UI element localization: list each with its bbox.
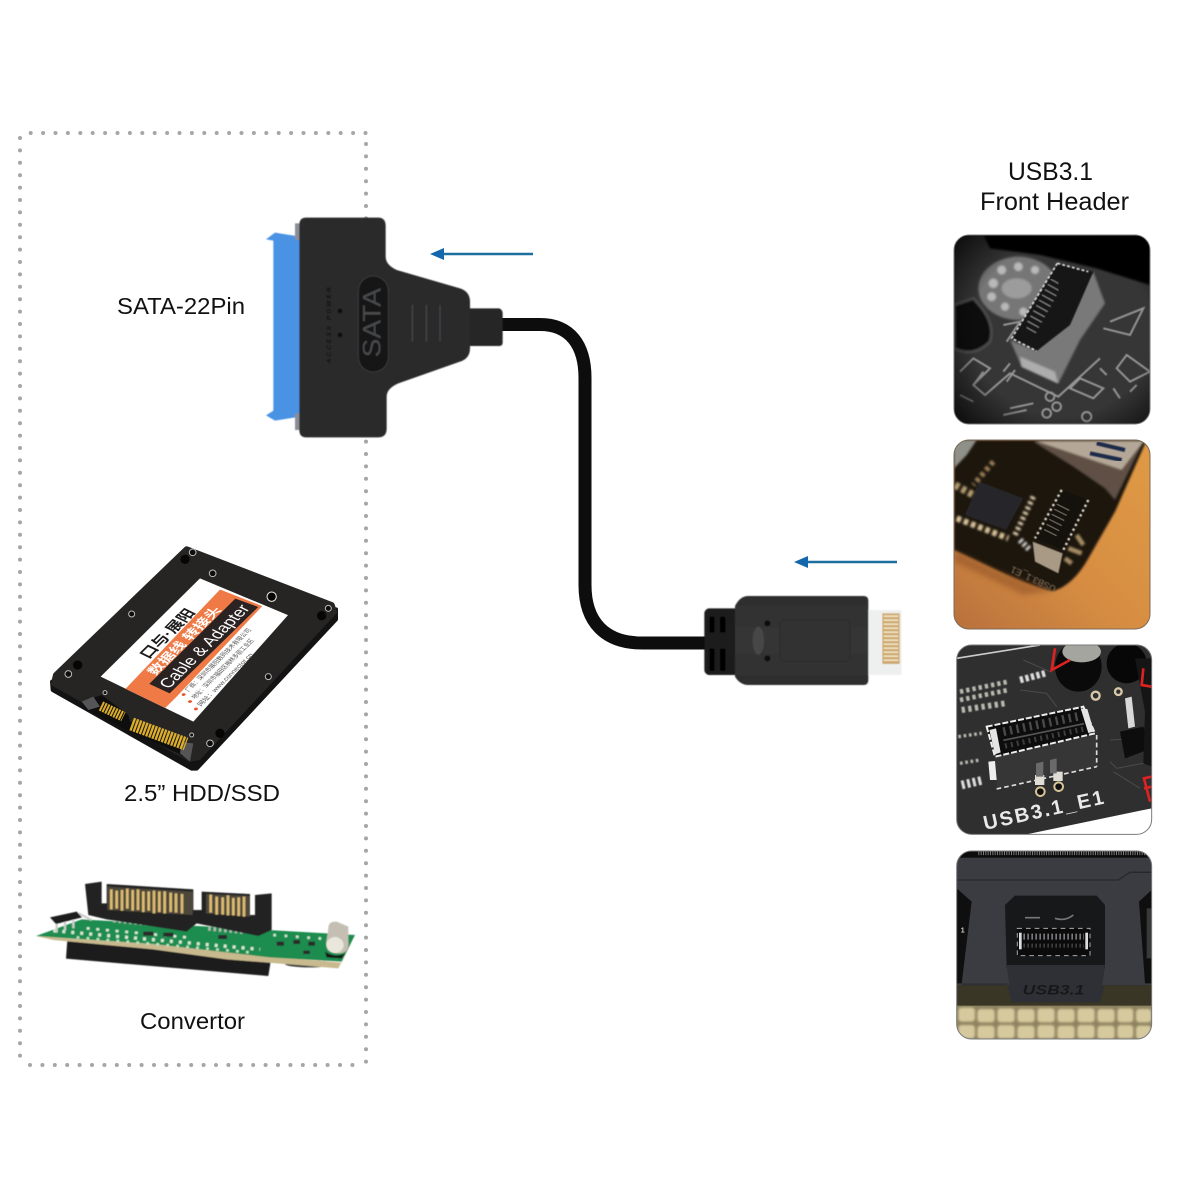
PCB edge xyxy=(36,936,354,968)
voltage regulator legs xyxy=(57,913,92,933)
voltage regulator xyxy=(50,912,82,924)
mounting recesses xyxy=(73,555,326,738)
address lines: 厂商：深圳市展阳数码技术有限公司 xyxy=(182,627,253,693)
crystal base xyxy=(325,952,345,958)
card outline xyxy=(954,440,1150,629)
bottom board band xyxy=(957,985,1152,1007)
data contact cavity xyxy=(107,887,193,915)
data contacts xyxy=(110,889,245,917)
panel: dotted SATA device frame xyxy=(20,133,366,1065)
white corner xyxy=(1023,808,1152,835)
address lines: 网址：www.connector.cn xyxy=(195,651,255,707)
silk text: USB3.1_E1 xyxy=(1009,564,1058,594)
white latch part xyxy=(988,761,997,780)
ribbed strain relief xyxy=(704,608,735,675)
wooden background xyxy=(954,440,1150,629)
SATA badge: SATA xyxy=(360,287,387,357)
port top face xyxy=(1035,441,1144,470)
white plug tongue xyxy=(868,610,902,675)
top vent strip xyxy=(957,851,1152,858)
keyhole xyxy=(267,592,276,601)
Chinese product line: 数据线 转接头 xyxy=(143,604,225,677)
header body xyxy=(1017,928,1090,956)
shroud highlight line xyxy=(957,872,1152,880)
label: 2.5 inch HDD/SSD: 2.5” HDD/SSD xyxy=(124,780,280,806)
right pin header xyxy=(1125,697,1135,728)
header lower pins xyxy=(1023,940,1084,952)
blurred left components xyxy=(954,440,977,468)
translucent connector shroud xyxy=(1010,272,1105,383)
pads group left xyxy=(958,673,1045,785)
heading: USB3.1 Front Header xyxy=(980,158,1129,216)
red annotation marks xyxy=(1052,648,1152,802)
socket side latches xyxy=(989,708,1094,754)
metal IO port xyxy=(1033,442,1143,500)
SATA badge xyxy=(358,276,388,372)
screw holes xyxy=(65,549,331,747)
crystal oscillator xyxy=(326,922,349,953)
side number: 1 xyxy=(961,925,965,934)
solder dots xyxy=(955,462,1083,563)
icon: 2.5 inch SSD enclosure xyxy=(52,549,336,769)
blurred power socket xyxy=(978,257,1058,320)
heading: USB3.1 Front Header: USB3.1 xyxy=(1008,158,1093,186)
orange band xyxy=(122,587,266,708)
right slot detail xyxy=(1147,908,1152,958)
socket pins xyxy=(1048,507,1063,537)
card outline xyxy=(957,645,1152,834)
socket pins xyxy=(1028,282,1057,333)
SATA connector recess xyxy=(82,695,193,762)
moulded plug body xyxy=(735,596,868,685)
arrow: into USB header xyxy=(794,556,897,568)
board background xyxy=(954,235,1150,424)
solder pads xyxy=(53,920,340,953)
header white sides xyxy=(1019,933,1088,949)
silk label USB3.1_E1: USB3.1_E1 xyxy=(981,787,1106,835)
label: Convertor: Convertor xyxy=(140,1008,245,1034)
shroud lower arm xyxy=(962,983,1145,1002)
socket dotted edges xyxy=(1035,490,1088,550)
photo: header in motherboard shroud xyxy=(957,851,1152,1039)
top pins xyxy=(957,645,1040,658)
Cable &amp; Adapter: Cable & Adapter xyxy=(154,601,254,691)
power contact cavity xyxy=(206,894,250,917)
socket edge highlights xyxy=(1012,263,1088,351)
strain relief neck xyxy=(470,308,503,346)
photo: header on board with wood background xyxy=(954,440,1150,629)
capacitors xyxy=(1055,641,1147,692)
white connector frame xyxy=(987,707,1095,757)
black socket below board xyxy=(66,940,272,976)
SATA plug housing xyxy=(85,882,272,936)
vignette xyxy=(954,235,1150,424)
header socket xyxy=(1035,490,1088,550)
vent slits xyxy=(978,848,1147,859)
moulded adapter body xyxy=(299,218,470,437)
address lines: 地址：深圳市福田区梅林多丽工业区 xyxy=(189,637,256,700)
access and power labels: ACCESS POWER xyxy=(326,287,333,364)
photo: header labelled USB3.1_E1 xyxy=(957,641,1152,835)
recess lip xyxy=(1007,965,1105,1002)
heading: USB3.1 Front Header: Front Header xyxy=(980,188,1129,216)
solder rings xyxy=(1092,688,1122,700)
relief slots xyxy=(709,617,725,671)
right side socket xyxy=(1120,726,1144,758)
main chip xyxy=(965,482,1023,530)
PCB traces xyxy=(960,308,1150,421)
beige material xyxy=(957,1006,1152,1039)
icon: SATA-22Pin adapter xyxy=(266,218,503,437)
beige cells xyxy=(958,1008,1151,1039)
socket pins xyxy=(1003,716,1087,746)
white label sheet xyxy=(101,574,297,722)
through-hole test pads xyxy=(1035,758,1063,796)
card outline xyxy=(954,235,1150,424)
enclosure edge xyxy=(52,609,336,769)
board background xyxy=(957,645,1152,834)
label: SATA-22Pin: SATA-22Pin xyxy=(117,293,245,319)
blue SATA connector xyxy=(266,233,300,421)
indicator dots and bump xyxy=(753,620,770,661)
photo: header on black and white board xyxy=(954,235,1150,424)
gold contacts xyxy=(882,613,900,664)
icon: USB3.1 key-A plug xyxy=(704,596,902,685)
green PCB xyxy=(36,919,355,962)
black band xyxy=(149,597,258,694)
shroud front xyxy=(1033,542,1063,573)
connector plastic ends xyxy=(82,697,193,762)
right black header xyxy=(1135,658,1152,767)
left dark slot xyxy=(957,888,972,983)
cable xyxy=(500,324,706,643)
grip lines xyxy=(412,305,440,342)
product label xyxy=(101,574,297,722)
blurred capacitor xyxy=(954,298,991,352)
USB3.1 embossed label: USB3.1 xyxy=(1023,981,1085,997)
dark upper area xyxy=(983,235,1150,285)
socket shroud xyxy=(995,735,1097,789)
SMD components xyxy=(143,932,315,954)
recessed label area xyxy=(780,620,850,662)
bright shroud face xyxy=(1020,357,1058,383)
dark board xyxy=(954,440,1147,591)
coin cell xyxy=(285,961,335,967)
octagonal recess xyxy=(1005,896,1105,968)
icon: SATA convertor board xyxy=(36,882,355,976)
right dark slot xyxy=(1139,890,1152,983)
power contacts xyxy=(132,724,186,744)
connector grey corners xyxy=(295,223,300,430)
pads above connector xyxy=(1025,915,1073,919)
header pins xyxy=(1023,928,1084,946)
shadow on wood xyxy=(954,550,1053,595)
port label marks xyxy=(1090,443,1125,460)
red bullets xyxy=(175,693,204,711)
board traces xyxy=(1020,660,1152,788)
crystal cap xyxy=(326,937,344,953)
card outline xyxy=(957,851,1152,1039)
shroud background xyxy=(957,851,1152,1039)
enclosure top face xyxy=(54,549,334,759)
shroud dashed edge xyxy=(997,735,1097,789)
indicator holes xyxy=(338,309,342,337)
brand logo: 口与·展阳 xyxy=(137,607,200,661)
signal contacts xyxy=(101,706,123,717)
arrow: into SATA device xyxy=(430,248,533,260)
header socket xyxy=(1012,263,1093,351)
